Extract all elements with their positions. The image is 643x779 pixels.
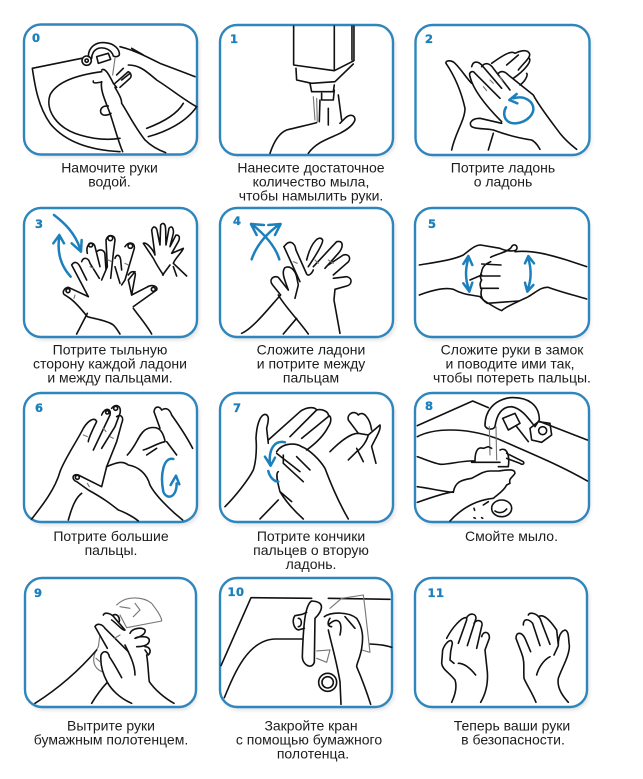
- caption: step 2: о ладонь: [474, 174, 532, 190]
- caption: step 10: с помощью бумажного: [236, 732, 382, 748]
- panel: step 5 interlocked fingers: [415, 208, 590, 340]
- panel: step 7 fingertips on palm: [220, 393, 395, 525]
- panel: step 11 safe hands: [415, 578, 589, 710]
- panel: step 8 rinse: [415, 393, 590, 525]
- caption: step 2: Потрите ладонь: [451, 160, 555, 176]
- panel: step 4 between fingers: [220, 208, 395, 340]
- step number 5: 5: [428, 217, 436, 231]
- panel: step 2 palm to palm: [416, 25, 591, 157]
- caption: step 0: водой.: [88, 174, 131, 190]
- caption: step 7: Потрите кончики: [257, 528, 365, 544]
- illustration: two open clean hands: [442, 613, 569, 702]
- arrow: circular rub: [504, 94, 533, 123]
- step number 1: 1: [230, 32, 238, 46]
- illustration: turning off tap with towel: [221, 595, 392, 704]
- caption: step 7: ладонь.: [286, 556, 336, 572]
- panel: step 6 rub thumbs: [24, 393, 199, 525]
- panel: step 9 dry hands: [25, 578, 197, 710]
- caption: step 11: в безопасности.: [461, 732, 565, 748]
- step number 7: 7: [233, 401, 241, 415]
- caption: step 5: Сложите руки в замок: [441, 342, 584, 358]
- arrow: rotation: [162, 459, 179, 497]
- caption: step 10: Закройте кран: [264, 718, 358, 734]
- caption: step 11: Теперь ваши руки: [454, 718, 570, 734]
- caption: step 4: и потрите между: [257, 356, 365, 372]
- caption: step 6: пальцы.: [85, 542, 137, 558]
- step number 10: 10: [227, 585, 245, 599]
- illustration: fingertips rubbed in palm: [225, 408, 380, 519]
- illustration: soap dispenser and palm: [270, 26, 355, 153]
- caption: step 8: Смойте мыло.: [465, 528, 558, 544]
- step number 4: 4: [233, 214, 241, 228]
- panel: step 1 apply soap: [220, 25, 395, 157]
- illustration: clasped hands: [419, 245, 587, 311]
- illustration: hand over hand with arrows: [53, 215, 187, 334]
- arrow: circular rub: [265, 442, 285, 482]
- caption: step 1: количество мыла,: [253, 174, 369, 190]
- caption: step 5: и поводите ими так,: [446, 356, 574, 372]
- caption: step 9: бумажным полотенцем.: [34, 732, 188, 748]
- step number 11: 11: [427, 586, 445, 600]
- illustration: thumb in fist: [32, 406, 193, 521]
- panel: step 0 wet hands: [24, 24, 199, 157]
- caption: step 1: Нанесите достаточное: [237, 160, 385, 176]
- step number 3: 3: [35, 217, 43, 231]
- caption: step 5: чтобы потереть пальцы.: [433, 370, 591, 386]
- step number 8: 8: [425, 399, 433, 413]
- illustration: hands with paper towel: [35, 598, 174, 703]
- caption: step 6: Потрите большие: [53, 528, 169, 544]
- caption: step 1: чтобы намылить руки.: [239, 188, 383, 204]
- caption: step 3: сторону каждой ладони: [33, 356, 187, 372]
- illustration: hands under tap at sink: [32, 43, 197, 153]
- illustration: rub palm to palm: [446, 51, 577, 150]
- caption: step 3: Потрите тыльную: [53, 342, 167, 358]
- caption: step 10: полотенца.: [277, 746, 349, 762]
- caption: step 3: и между пальцами.: [47, 370, 173, 386]
- step number 9: 9: [34, 586, 42, 600]
- step number 0: 0: [32, 31, 40, 45]
- illustration: interlaced flat hands: [242, 224, 351, 334]
- arrows: up and down: [463, 256, 534, 292]
- step number 6: 6: [35, 401, 43, 415]
- illustration: hands under running water: [417, 398, 587, 521]
- caption: step 9: Вытрите руки: [67, 718, 155, 734]
- caption: step 4: пальцам: [283, 370, 339, 386]
- step number 2: 2: [425, 32, 433, 46]
- caption: step 4: Сложите ладони: [257, 342, 365, 358]
- caption: step 0: Намочите руки: [61, 160, 158, 176]
- panel: step 3 backs of hands: [24, 208, 199, 340]
- panel: step 10 close tap: [220, 578, 394, 710]
- caption: step 7: пальцев о вторую: [253, 542, 369, 558]
